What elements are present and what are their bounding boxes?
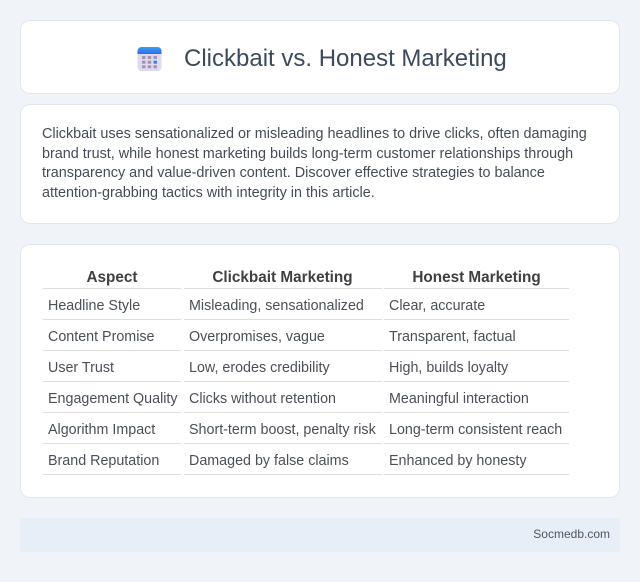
row: Algorithm Impact: Algorithm Impact xyxy=(48,422,155,438)
icon: calendar xyxy=(138,47,162,71)
intro paragraph: transparency and value-driven content. Discover effective strategies to balance xyxy=(42,165,545,181)
row: User Trust: High, builds loyalty xyxy=(389,360,508,376)
table header: Honest Marketing xyxy=(412,269,541,286)
row: Content Promise xyxy=(48,329,516,345)
row: Engagement Quality xyxy=(48,391,529,407)
row: Algorithm Impact xyxy=(48,422,562,438)
title card xyxy=(20,20,620,94)
row: Headline Style: Headline Style xyxy=(48,298,140,314)
row: Brand Reputation: Brand Reputation xyxy=(48,453,159,469)
row: Content Promise: Overpromises, vague xyxy=(189,329,325,345)
row: User Trust: Low, erodes credibility xyxy=(189,360,330,376)
table header: Clickbait Marketing xyxy=(212,269,353,286)
intro paragraph: Clickbait uses sensationalized or misleading headlines to drive clicks, often damaging xyxy=(42,126,587,142)
row: Brand Reputation xyxy=(48,453,527,469)
panel: intro text xyxy=(20,104,620,224)
row: Algorithm Impact: Long-term consistent reach xyxy=(389,422,562,438)
row: Content Promise: Transparent, factual xyxy=(389,329,516,345)
footer bar xyxy=(20,518,620,552)
intro paragraph: brand trust, while honest marketing builds long-term customer relationships through xyxy=(42,146,573,162)
row: Brand Reputation: Damaged by false claims xyxy=(189,453,349,469)
intro paragraph: attention-grabbing tactics with integrity in this article. xyxy=(42,184,375,200)
row: Brand Reputation: Enhanced by honesty xyxy=(389,453,527,469)
table header: Aspect xyxy=(86,269,138,286)
row: Engagement Quality: Engagement Quality xyxy=(48,391,178,407)
intro paragraph xyxy=(42,126,587,200)
row: Algorithm Impact: Short-term boost, penalty risk xyxy=(189,422,376,438)
row: Headline Style: Misleading, sensationalized xyxy=(189,298,364,314)
row: User Trust: User Trust xyxy=(48,360,114,376)
row: Content Promise: Content Promise xyxy=(48,329,154,345)
table header xyxy=(86,269,541,286)
row: Headline Style xyxy=(48,298,485,314)
footer credit: Socmedb.com xyxy=(533,527,610,541)
row: Engagement Quality: Meaningful interaction xyxy=(389,391,529,407)
panel: comparison table xyxy=(20,244,620,498)
row: Engagement Quality: Clicks without retention xyxy=(189,391,336,407)
row: User Trust xyxy=(48,360,508,376)
row: Headline Style: Clear, accurate xyxy=(389,298,485,314)
heading: Clickbait vs. Honest Marketing xyxy=(184,45,507,72)
